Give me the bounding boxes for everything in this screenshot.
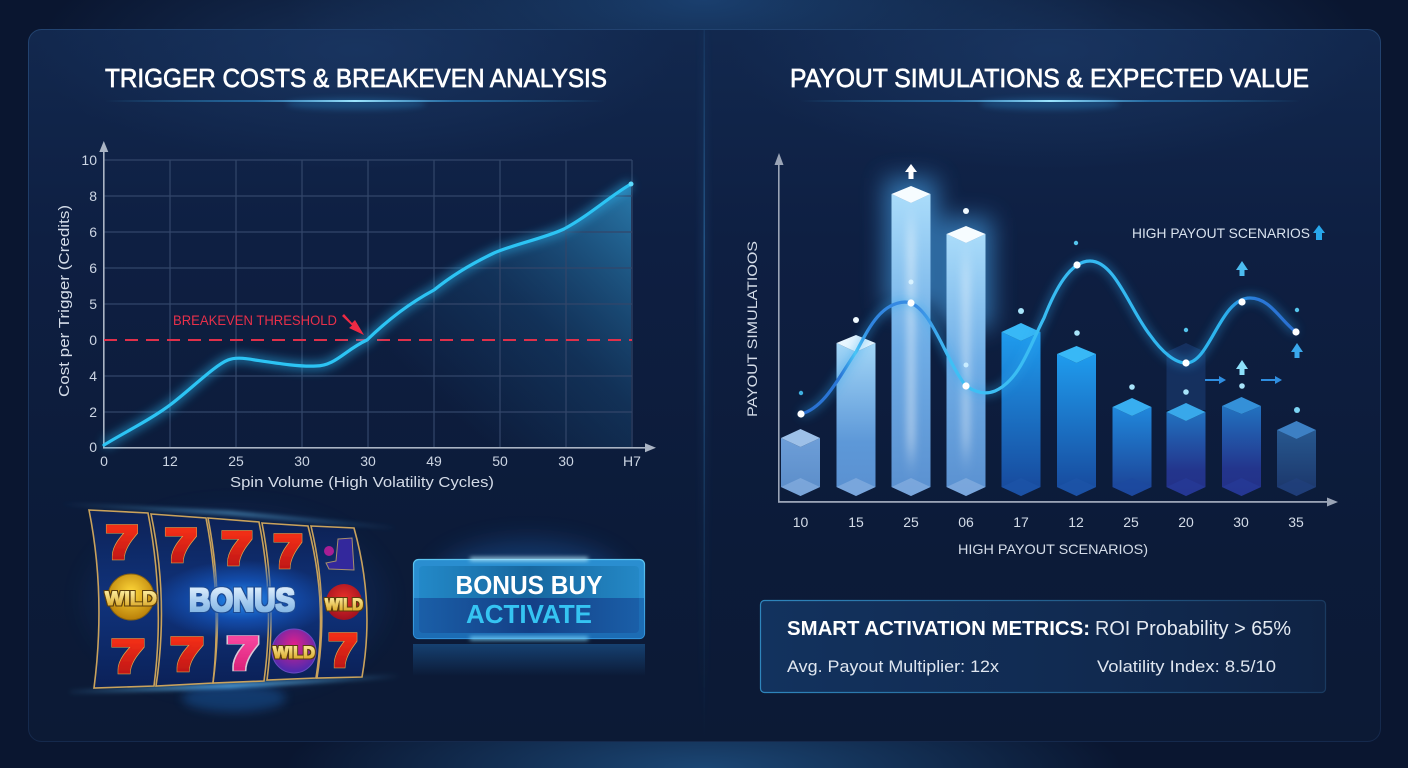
panel: smart activation metrics	[760, 600, 1326, 692]
red sevens: 7	[170, 629, 204, 680]
x axis ticks: 0	[100, 453, 108, 469]
right arrow one	[1205, 376, 1226, 384]
pink seven: 7	[227, 628, 259, 680]
axes	[774, 153, 1338, 506]
button lower inner face	[419, 598, 639, 633]
payout curve	[801, 261, 1296, 414]
button top highlight	[470, 558, 588, 560]
y axis ticks: 5	[89, 296, 97, 312]
glow behind reels	[85, 510, 385, 690]
ghost bar	[1166, 343, 1206, 410]
button upper inner face	[419, 566, 639, 598]
wild labels: WILD	[273, 643, 315, 662]
y axis ticks: 2	[89, 404, 97, 420]
x axis ticks	[100, 453, 641, 469]
x axis ticks: 30	[1233, 514, 1249, 530]
bar 25 tall	[892, 186, 930, 496]
button reflection	[413, 644, 645, 676]
floor reflection	[182, 684, 286, 712]
bar 12	[1057, 346, 1096, 496]
button label: BONUS BUY	[456, 570, 602, 600]
button glow	[434, 540, 624, 620]
reel 2	[151, 514, 216, 686]
button body	[414, 560, 644, 638]
x axis ticks: 20	[1178, 514, 1194, 530]
high payout label: HIGH PAYOUT SCENARIOS	[1132, 225, 1310, 241]
red wild coin	[326, 584, 362, 620]
blue symbol dot	[324, 546, 334, 556]
high payout arrow	[1313, 225, 1325, 240]
average payout multiplier: Avg. Payout Multiplier: 12x	[787, 657, 1000, 676]
metrics heading: SMART ACTIVATION METRICS:	[787, 618, 1090, 640]
red sevens: 7	[105, 517, 139, 568]
y axis ticks: 0	[89, 332, 97, 348]
x axis ticks: H7	[623, 453, 641, 469]
right arrow two	[1261, 376, 1282, 384]
x axis ticks: 25	[228, 453, 244, 469]
slot machine illustration	[62, 504, 400, 712]
roi probability: ROI Probability > 65%	[1095, 618, 1291, 640]
y axis label: Cost per Trigger (Credits)	[56, 205, 73, 397]
reel 3	[208, 518, 268, 683]
x axis ticks: 50	[492, 453, 508, 469]
bar glows	[885, 178, 992, 328]
breakeven label: BREAKEVEN THRESHOLD	[173, 312, 337, 328]
heading: trigger costs: TRIGGER COSTS & BREAKEVEN ANALYSIS	[105, 63, 607, 93]
gold wild coin	[108, 574, 154, 620]
heading: payout simulations: PAYOUT SIMULATIONS & EXPECTED VALUE	[790, 63, 1309, 93]
heading: trigger costs	[105, 63, 607, 110]
button lower edge	[414, 598, 644, 638]
curve points	[797, 261, 1300, 418]
up arrow white	[905, 164, 917, 179]
bar 20	[1166, 403, 1206, 496]
grid	[104, 160, 632, 447]
cost curve	[104, 184, 631, 445]
wild labels: WILD	[105, 589, 157, 610]
button bottom highlight	[470, 637, 588, 640]
x axis ticks: 30	[558, 453, 574, 469]
bar 30	[1222, 397, 1261, 496]
bar 15	[836, 335, 876, 496]
x axis label: Spin Volume (High Volatility Cycles)	[230, 474, 494, 491]
bar chart: payout simulations	[744, 153, 1338, 557]
y axis ticks: 6	[89, 224, 97, 240]
x axis ticks: 49	[426, 453, 442, 469]
x axis ticks: 15	[848, 514, 864, 530]
up arrow middle	[1236, 360, 1248, 375]
y axis ticks	[81, 152, 97, 455]
up arrow right	[1291, 343, 1303, 358]
y axis ticks: 0	[89, 439, 97, 455]
x axis ticks: 25	[1123, 514, 1139, 530]
blue symbol	[326, 538, 354, 570]
y axis ticks: 10	[81, 152, 97, 168]
volatility index: Volatility Index: 8.5/10	[1097, 657, 1276, 676]
red sevens: 7	[328, 624, 358, 676]
heading: payout simulations	[790, 63, 1309, 110]
bar 17	[1002, 323, 1040, 496]
x axis ticks: 25	[903, 514, 919, 530]
x axis ticks: 10	[793, 514, 808, 530]
line chart: cost per trigger	[56, 141, 656, 491]
curve end point	[628, 182, 634, 186]
bonus text: BONUS	[189, 582, 295, 618]
x axis ticks: 30	[294, 453, 310, 469]
wild labels	[105, 589, 363, 662]
bar 25 short	[1112, 398, 1152, 496]
x axis ticks: 06	[958, 514, 974, 530]
floating dots	[799, 208, 1300, 413]
axes	[99, 141, 656, 452]
bar 06	[946, 226, 986, 496]
red sevens: 7	[164, 520, 198, 571]
y axis ticks: 4	[89, 368, 97, 384]
y axis label: PAYOUT SIMULATIOOS	[744, 241, 760, 417]
x axis ticks	[793, 514, 1304, 530]
curve glow	[104, 184, 631, 445]
x axis ticks: 12	[162, 453, 178, 469]
top light strip	[62, 504, 395, 528]
reel 5	[311, 526, 367, 678]
red sevens: 7	[111, 631, 145, 682]
x axis ticks: 35	[1288, 514, 1304, 530]
red sevens	[105, 517, 358, 682]
area under curve	[170, 184, 631, 447]
x axis ticks: 30	[360, 453, 376, 469]
red sevens: 7	[221, 523, 253, 575]
wild labels: WILD	[325, 595, 363, 614]
breakeven arrow	[342, 314, 364, 335]
x axis ticks: 12	[1068, 514, 1084, 530]
purple wild coin	[272, 629, 316, 673]
curve glow	[801, 261, 1296, 414]
y axis ticks: 8	[89, 188, 97, 204]
y axis ticks: 6	[89, 260, 97, 276]
reel 4	[262, 523, 320, 680]
bar 10	[781, 429, 820, 496]
button: bonus buy activate	[413, 540, 645, 676]
reel 1	[89, 510, 158, 688]
up arrow high	[1236, 261, 1248, 276]
red sevens: 7	[273, 525, 303, 577]
bonus burst glow	[154, 560, 330, 640]
button action: ACTIVATE	[466, 599, 592, 629]
x axis label: HIGH PAYOUT SCENARIOS)	[958, 541, 1148, 557]
bar 35	[1277, 421, 1316, 496]
bottom light strip	[70, 676, 400, 692]
breakeven line	[104, 339, 632, 341]
x axis ticks: 17	[1013, 514, 1029, 530]
